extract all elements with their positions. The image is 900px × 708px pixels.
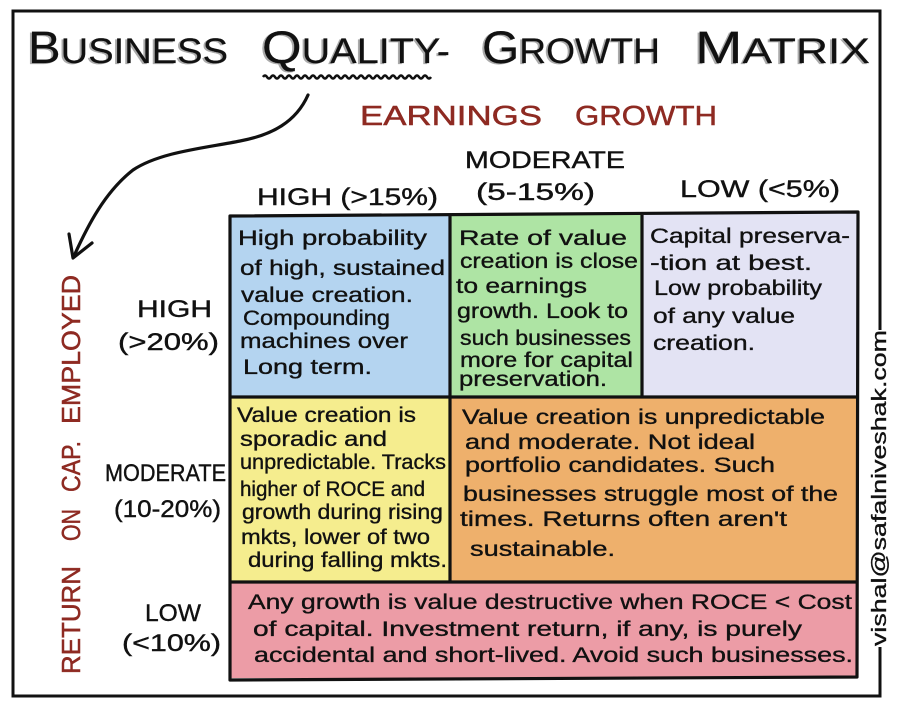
title: GROWTH	[482, 22, 660, 73]
column heading: high growth: HIGH (>15%)	[257, 184, 438, 211]
panel: moderate return, high growth: during falling mkts.	[248, 549, 447, 572]
title: QUALITY-	[262, 22, 450, 73]
credit: vishal@safalniveshak.com	[869, 330, 891, 646]
panel: moderate return, high growth: Value creation is	[237, 404, 416, 427]
panel: high return, moderate growth: such businesses	[460, 327, 631, 350]
matrix grid lines	[230, 212, 858, 680]
axis label: return on capital employed: CAP.	[56, 441, 86, 492]
axis label: return on capital employed: EMPLOYED	[56, 275, 86, 424]
panel: high return, low growth: creation.	[653, 332, 755, 355]
arrow: quality to return on capital employed	[69, 95, 308, 258]
row label: high return: HIGH	[137, 296, 212, 323]
panel: high return, high growth: of high, sustained	[240, 257, 445, 280]
row label: moderate return: MODERATE	[105, 460, 226, 487]
panel: moderate return, high growth: unpredictable. Tracks	[240, 451, 446, 474]
title: BUSINESS	[28, 22, 228, 73]
panel: moderate return, moderate and low growth	[450, 397, 857, 582]
panel: moderate return, moderate and low growth: portfolio candidates. Such	[465, 454, 775, 477]
panel: low return: accidental and short-lived. Avoid such businesses.	[254, 644, 853, 667]
row label: low return: (<10%)	[122, 630, 221, 657]
panel: high return, high growth: Compounding	[243, 307, 390, 330]
panel: high return, moderate growth: more for capital	[460, 349, 633, 372]
panel: high return, high growth: machines over	[240, 330, 408, 353]
axis label: return on capital employed	[56, 275, 86, 674]
title	[28, 22, 870, 78]
panel: low return: of capital. Investment return, if any, is purely	[253, 618, 803, 641]
panel: low return	[230, 582, 857, 678]
row label: moderate return: (10-20%)	[114, 496, 221, 523]
axis label: return on capital employed: RETURN	[56, 566, 86, 674]
heading: earnings growth: EARNINGS	[360, 100, 542, 131]
row label: moderate return	[105, 460, 226, 523]
panel: high return, low growth: -tion at best.	[650, 252, 812, 275]
panel: high return, low growth	[642, 213, 857, 397]
panel: moderate return, moderate and low growth: Value creation is unpredictable	[462, 406, 825, 429]
panel: moderate return, high growth: higher of ROCE and	[240, 478, 425, 501]
row label: low return	[122, 600, 221, 657]
panel: high return, low growth: of any value	[653, 305, 795, 328]
column heading: moderate growth: MODERATE	[465, 147, 625, 174]
panel: moderate return, high growth	[230, 397, 450, 582]
panel: moderate return, high growth: sporadic and	[240, 428, 387, 451]
row label: low return: LOW	[145, 600, 201, 627]
panel: high return, low growth: Low probability	[654, 277, 823, 300]
heading: earnings growth: GROWTH	[575, 100, 717, 131]
panel: low return: Any growth is value destructive when ROCE < Cost	[248, 591, 852, 614]
panel: moderate return, moderate and low growth: businesses struggle most of the	[463, 483, 838, 506]
axis label: return on capital employed: ON	[56, 509, 86, 541]
row label: high return	[118, 296, 219, 356]
panel: high return, high growth	[230, 216, 450, 397]
panel: high return, low growth: Capital preserva-	[650, 225, 850, 248]
panel: moderate return, high growth: growth during rising	[242, 501, 443, 524]
panel: high return, moderate growth: Rate of value	[459, 227, 627, 250]
panel: high return, moderate growth: growth. Look to	[457, 300, 628, 323]
panel: moderate return, moderate and low growth: times. Returns often aren't	[460, 508, 787, 531]
panel: high return, high growth: Long term.	[243, 356, 372, 379]
row label: high return: (>20%)	[118, 329, 219, 356]
panel: moderate return, moderate and low growth: sustainable.	[470, 538, 615, 561]
panel: moderate return, high growth: mkts, lower of two	[241, 526, 430, 549]
panel: high return, moderate growth: creation is close	[460, 250, 638, 273]
panel: high return, moderate growth	[450, 214, 642, 397]
column heading: low growth: LOW (<5%)	[680, 176, 840, 203]
column heading: moderate growth	[465, 147, 625, 206]
panel: high return, moderate growth: preservation.	[459, 368, 607, 391]
panel: moderate return, moderate and low growth: and moderate. Not ideal	[465, 431, 755, 454]
panel: high return, high growth: High probability	[238, 227, 428, 250]
panel: high return, moderate growth: to earnings	[456, 275, 587, 298]
column heading: moderate growth: (5-15%)	[476, 179, 595, 206]
title: M ATRIX	[695, 22, 870, 73]
heading: earnings growth	[360, 100, 717, 131]
panel: high return, high growth: value creation.	[241, 284, 413, 307]
